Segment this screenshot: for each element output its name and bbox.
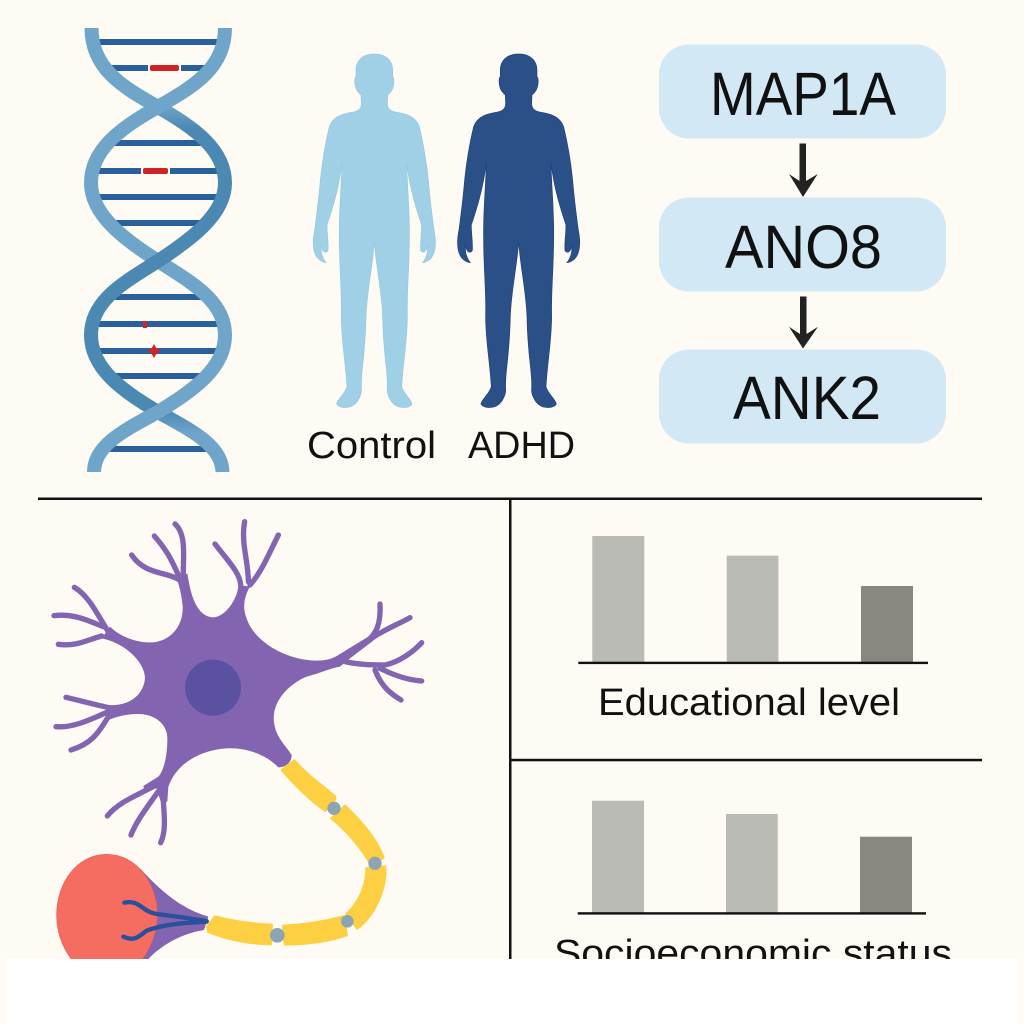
bar chart: educational level <box>578 536 928 724</box>
icon: DNA double helix <box>91 28 225 472</box>
gene box: MAP1A: MAP1A <box>710 60 896 128</box>
gene box: ANO8 <box>659 198 946 292</box>
bar chart: socioeconomic status <box>554 801 952 975</box>
myelin segments <box>207 761 385 944</box>
DNA base-pair rungs <box>97 39 219 452</box>
label: ADHD: ADHD <box>468 425 575 467</box>
chart label: Educational level: Educational level <box>598 682 900 724</box>
DNA strands <box>91 28 225 472</box>
figure: ADHD body silhouette <box>457 54 580 408</box>
figure: control body silhouette <box>313 54 435 408</box>
gene box: ANK2 <box>659 350 946 444</box>
nodes of Ranvier <box>270 802 382 943</box>
gene box: ANK2: ANK2 <box>733 364 881 432</box>
arrow: MAP1A to ANO8 <box>789 144 818 197</box>
gene box: ANO8: ANO8 <box>725 213 882 281</box>
chart label: Socioeconomic status: Socioeconomic status <box>554 933 952 975</box>
axon terminal and synaptic target <box>57 854 208 970</box>
section divider lines <box>38 498 982 968</box>
gene box: MAP1A <box>659 44 946 138</box>
illustration: neuron <box>54 522 422 970</box>
label: Control: Control <box>307 425 436 467</box>
white bottom band <box>6 959 1018 1024</box>
arrow: ANO8 to ANK2 <box>789 296 818 348</box>
DNA mutation markers <box>141 64 181 358</box>
neuron cell body and dendrites <box>54 522 422 843</box>
neuron nucleus <box>185 660 241 716</box>
axon with myelin sheath <box>57 761 385 970</box>
